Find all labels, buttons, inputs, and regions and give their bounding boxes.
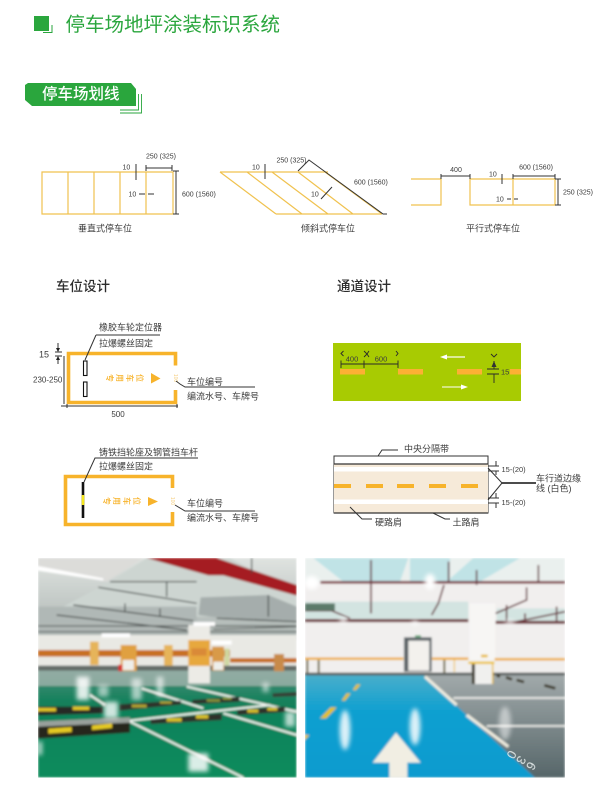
diagram: angled parking: 600 (1560) <box>354 180 388 186</box>
diagram: perpendicular parking: 10 <box>122 164 130 172</box>
diagram: angled parking: 10 <box>311 192 319 198</box>
stall diagram 2: cast iron wheel stop: 编流水号、车牌号 <box>187 512 259 523</box>
caption: 倾斜式停车位 <box>301 222 355 234</box>
stall diagram 1: rubber wheel stop: 编流水号、车牌号 <box>187 390 259 402</box>
stall diagram 2: cast iron wheel stop: 专用车位 <box>102 497 142 505</box>
stall diagram 2: cast iron wheel stop: 车位编号 <box>187 498 223 508</box>
diagram: parallel parking: 600 (1560) <box>519 164 553 172</box>
floor lines <box>453 698 565 726</box>
aisle diagram: road cross-section <box>334 443 581 528</box>
pillars <box>90 625 284 683</box>
diagram: perpendicular parking: 10 <box>128 192 136 198</box>
floor <box>305 673 565 778</box>
diagram: parallel parking: 10 <box>489 172 497 178</box>
stall diagram 1: rubber wheel stop: 拉爆螺丝固定 <box>99 338 153 348</box>
ceiling <box>305 558 565 583</box>
stall diagram 1: rubber wheel stop <box>33 322 259 419</box>
dimensions <box>55 335 255 408</box>
stall diagram 1: rubber wheel stop: 15 <box>39 350 49 360</box>
reflections <box>304 574 515 750</box>
aisle diagram: road cross-section: 15-(20) <box>502 465 526 474</box>
bollard barrier <box>468 655 494 684</box>
steel bar stop <box>82 482 84 518</box>
stall diagram 2: cast iron wheel stop: 铸铁挡轮座及钢管挡车杆 <box>99 446 198 458</box>
yellow rail <box>305 656 565 662</box>
aisle diagram: lane dashes: 600 <box>375 354 387 364</box>
wheel stops <box>38 692 297 739</box>
reflections <box>38 677 295 772</box>
stall diagram 2: cast iron wheel stop: 拉爆螺丝固定 <box>99 460 153 472</box>
diagram: parallel parking: 250 (325) <box>563 190 593 196</box>
duct <box>198 595 297 622</box>
diagram: perpendicular parking <box>42 154 216 234</box>
wheel stops <box>84 361 87 396</box>
diagram: perpendicular parking: 600 (1560) <box>182 192 216 198</box>
stall diagram 1: rubber wheel stop: 车位编号 <box>187 376 223 387</box>
floor number: 036 <box>503 748 538 772</box>
aisle diagram: road cross-section: 线 (白色) <box>536 482 572 494</box>
aisle diagram: lane dashes: 15 <box>501 368 509 376</box>
door <box>404 635 432 672</box>
diagram: parallel parking: 10 <box>496 196 504 204</box>
caption: 垂直式停车位 <box>78 222 132 234</box>
aisle diagram: road cross-section: 硬路肩 <box>375 516 402 528</box>
wall <box>38 635 297 667</box>
floor lines <box>88 684 297 778</box>
stall diagram 1: rubber wheel stop: 230-250 <box>33 376 63 384</box>
stall diagram 1: rubber wheel stop: 100 <box>172 374 178 382</box>
section tag: parking lines <box>25 83 142 113</box>
aisle diagram: lane dashes <box>333 343 521 401</box>
header icon <box>34 16 52 32</box>
stall diagram 1: rubber wheel stop: 橡胶车轮定位器 <box>99 322 162 332</box>
title: 停车场地坪涂装标识系统 <box>66 14 280 36</box>
photo: green parking floor <box>38 558 297 778</box>
diagram: angled parking <box>220 158 388 234</box>
pipes <box>319 580 565 586</box>
pillar column <box>469 603 495 660</box>
diagram: perpendicular parking: 250 (325) <box>146 154 176 160</box>
stall diagram 1: rubber wheel stop: 专用车位 <box>105 374 145 382</box>
aisle diagram: road cross-section: 土路肩 <box>452 516 480 528</box>
photo: blue parking floor <box>304 558 565 778</box>
diagram: parallel parking <box>411 164 593 234</box>
floor <box>38 671 297 778</box>
caption: 平行式停车位 <box>466 222 520 234</box>
diagram: parallel parking: 400 <box>450 167 462 174</box>
section tag: parking lines: 停车场划线 <box>42 85 120 103</box>
aisle diagram: lane dashes: 400 <box>346 354 358 364</box>
heading: aisle design: 通道设计 <box>337 278 391 294</box>
aisle diagram: road cross-section: 中央分隔带 <box>404 443 449 454</box>
heading: stall design: 车位设计 <box>56 278 110 294</box>
stall diagram 2: cast iron wheel stop <box>66 446 259 524</box>
stall diagram 2: cast iron wheel stop: 100 <box>169 497 175 505</box>
aisle diagram: road cross-section: 车行道边缘 <box>536 472 581 484</box>
diagram: angled parking: 10 <box>252 164 260 172</box>
aisle diagram: road cross-section: 15-(20) <box>502 498 526 507</box>
floor arrow <box>373 733 421 778</box>
diagram: angled parking: 250 (325) <box>276 158 306 164</box>
red beam <box>147 558 297 596</box>
white arrows <box>440 354 468 390</box>
stall diagram 1: rubber wheel stop: 500 <box>111 410 125 419</box>
